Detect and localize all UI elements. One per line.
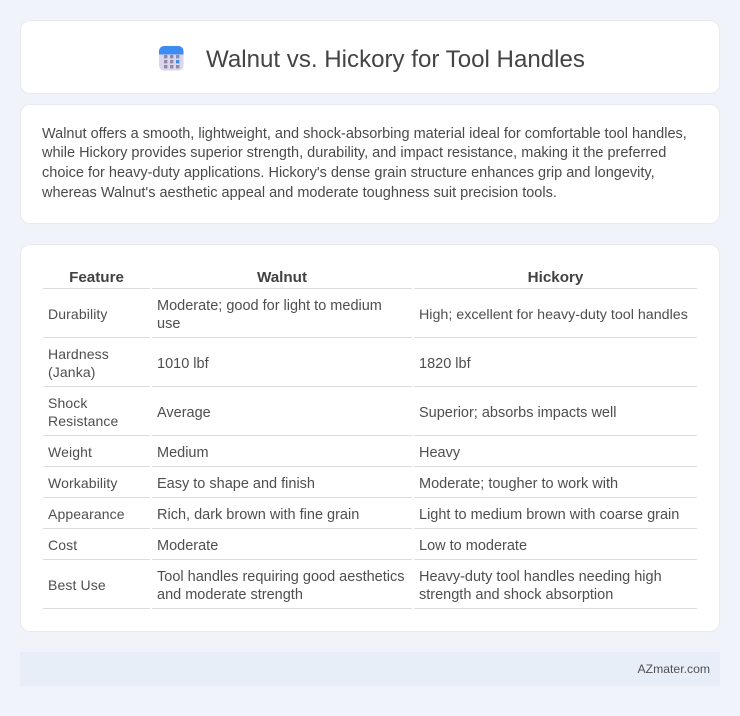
row: weight: Medium <box>157 445 209 461</box>
row: appearance: Light to medium brown with coarse grain <box>419 507 679 523</box>
footer bar <box>20 652 720 686</box>
row: durability: High; excellent for heavy-duty tool handles <box>419 307 688 323</box>
summary text: while Hickory provides superior strength, durability, and impact resistance, making it the preferred <box>42 145 666 161</box>
row: shock resistance: Superior; absorbs impacts well <box>419 405 616 421</box>
row: workability: Workability <box>48 475 118 491</box>
column headers: Hickory <box>528 269 583 286</box>
row: appearance: Appearance <box>48 506 125 522</box>
row: hardness: 1010 lbf <box>157 356 209 372</box>
row: shock resistance <box>48 395 616 429</box>
title panel <box>20 20 720 94</box>
row: best use: Tool handles requiring good aesthetics <box>157 569 404 585</box>
row: best use <box>48 569 662 603</box>
summary text: Walnut offers a smooth, lightweight, and shock-absorbing material ideal for comfortable tool handles, <box>42 126 687 142</box>
title: Walnut vs. Hickory for Tool Handles <box>206 46 585 73</box>
row: shock resistance: Shock <box>48 395 88 411</box>
row: durability: Moderate; good for light to medium <box>157 298 382 314</box>
row: durability <box>48 298 688 332</box>
column headers: Feature <box>69 269 124 286</box>
summary text <box>42 126 687 201</box>
row: best use: and moderate strength <box>157 587 303 603</box>
column headers: Walnut <box>257 269 307 286</box>
row: cost: Low to moderate <box>419 538 527 554</box>
row: workability: Moderate; tougher to work with <box>419 476 618 492</box>
row: weight: Weight <box>48 444 92 460</box>
summary text: whereas Walnut's aesthetic appeal and moderate toughness suit precision tools. <box>42 185 557 201</box>
row: best use: Best Use <box>48 577 106 593</box>
row: appearance: Rich, dark brown with fine grain <box>157 507 359 523</box>
row: workability: Easy to shape and finish <box>157 476 315 492</box>
column headers <box>69 269 584 286</box>
row: workability <box>48 475 618 492</box>
row: weight <box>48 444 460 461</box>
row: cost <box>48 537 527 554</box>
icon: calendar <box>159 46 184 70</box>
row: best use: strength and shock absorption <box>419 587 613 603</box>
summary panel <box>20 104 720 224</box>
row: hardness: Hardness <box>48 346 109 362</box>
summary text: choice for heavy-duty applications. Hickory's dense grain structure enhances grip and longevity, <box>42 165 655 181</box>
row: appearance <box>48 506 679 523</box>
row: hardness: 1820 lbf <box>419 356 471 372</box>
row: weight: Heavy <box>419 445 460 461</box>
row: hardness: (Janka) <box>48 364 96 380</box>
row: best use: Heavy-duty tool handles needing high <box>419 569 662 585</box>
row: shock resistance: Average <box>157 405 211 421</box>
comparison table <box>43 269 697 609</box>
row: durability: use <box>157 316 180 332</box>
comparison table panel <box>20 244 720 632</box>
row: hardness <box>48 346 471 380</box>
row: cost: Cost <box>48 537 77 553</box>
footer credit: AZmater.com <box>638 662 710 676</box>
row: durability: Durability <box>48 306 108 322</box>
row: shock resistance: Resistance <box>48 413 118 429</box>
row: cost: Moderate <box>157 538 218 554</box>
